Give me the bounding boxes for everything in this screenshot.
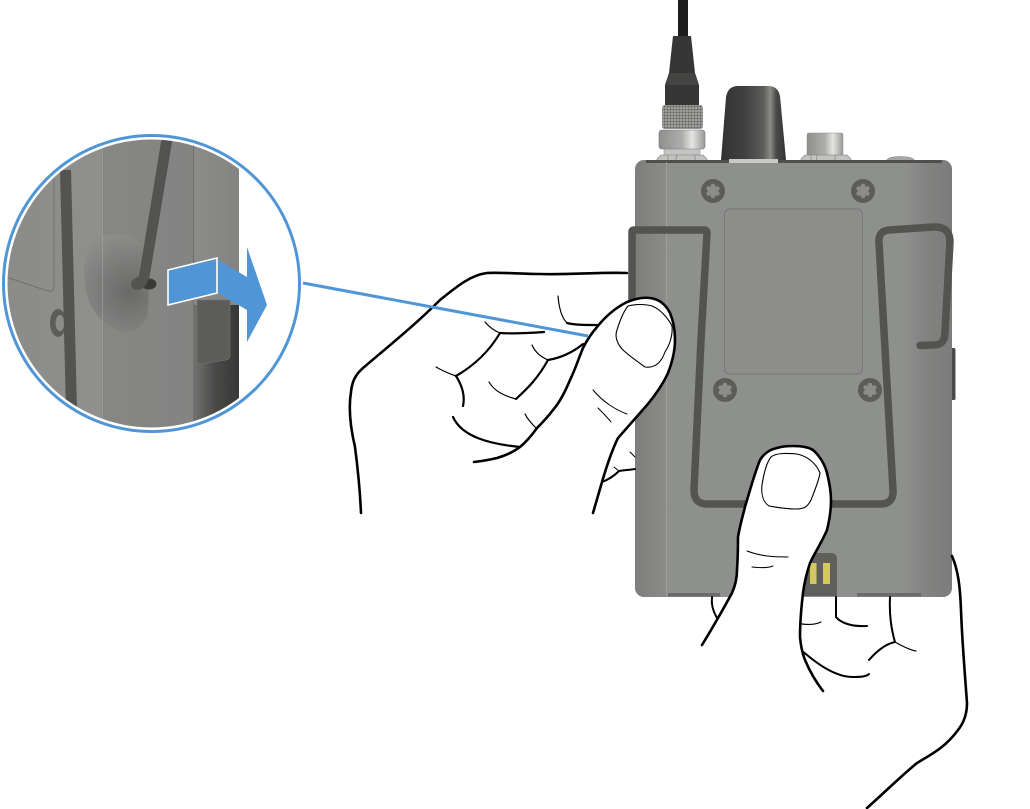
knurled ring — [662, 105, 703, 129]
right thumb creases — [747, 551, 788, 568]
top dark band — [646, 160, 942, 163]
bottom strip right — [857, 593, 921, 596]
finger crease lines — [453, 323, 597, 447]
strain relief — [665, 36, 699, 105]
zoomed side button — [197, 300, 230, 364]
magnified detail circle — [0, 130, 300, 440]
arrow — [168, 247, 267, 342]
seam lines — [102, 148, 103, 419]
screw top right — [851, 179, 875, 203]
right thumb — [702, 446, 831, 691]
pressure shadow — [84, 251, 149, 326]
right thumbnail — [762, 453, 820, 509]
slot — [144, 278, 156, 290]
right hand fingers behind device — [712, 556, 967, 808]
leader line — [303, 283, 588, 336]
screw bottom left — [713, 378, 737, 402]
connector collar — [659, 130, 705, 149]
left thumb — [474, 298, 675, 513]
contact 1 — [810, 563, 816, 584]
battery label panel — [724, 209, 862, 374]
second connector — [807, 133, 843, 156]
cable — [678, 0, 688, 37]
connector neck — [664, 148, 700, 157]
lens white ring — [6, 138, 298, 430]
device connectors on top edge — [657, 0, 918, 163]
zoomed label panel edge — [8, 177, 54, 292]
screw top left — [701, 179, 725, 203]
zoomed clip end — [131, 136, 173, 290]
belt clip — [632, 227, 950, 504]
zoomed screw — [50, 309, 64, 337]
bottom strip left — [668, 593, 720, 596]
web of thumb — [602, 469, 635, 482]
zoomed dark side — [193, 305, 239, 422]
small button — [883, 156, 918, 163]
lens blue ring — [4, 136, 300, 432]
housing — [635, 160, 952, 597]
left thumbnail — [616, 304, 672, 367]
zoomed clip left — [60, 170, 77, 410]
side button — [951, 348, 956, 400]
contact 2 — [823, 563, 830, 584]
side panel — [8, 140, 239, 428]
left hand back — [350, 273, 627, 513]
second connector nut — [801, 155, 851, 163]
connector nut — [657, 155, 707, 163]
rotary knob — [721, 86, 786, 160]
screw bottom right — [858, 378, 882, 402]
left thumb creases — [593, 390, 635, 457]
device body — [632, 159, 952, 597]
lens content — [8, 140, 239, 428]
battery contact recess — [803, 553, 837, 596]
seam line — [666, 162, 668, 596]
